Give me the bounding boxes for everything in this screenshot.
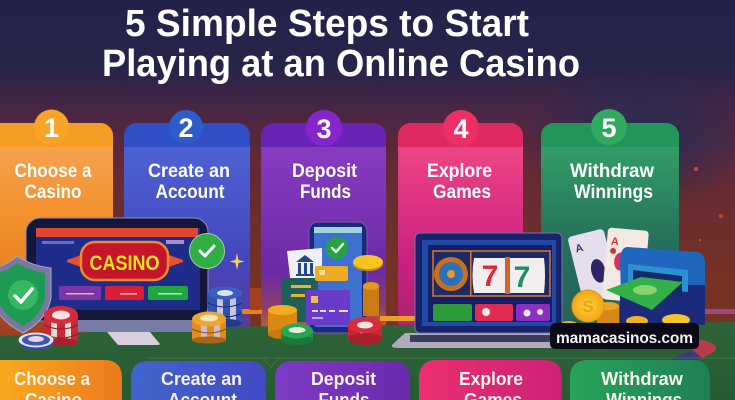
panel: bottom step 1 (0, 360, 122, 400)
orange glow ledge behind table (0, 288, 735, 336)
icon: gold coins (561, 290, 690, 327)
title: Playing at an Online Casino (102, 43, 580, 85)
casino sign: CASINO (90, 252, 160, 275)
step 4 badge (443, 110, 479, 146)
panel: step 4 card: Games (433, 182, 491, 203)
step 3 label: Deposit (292, 161, 358, 182)
icon: orange chip stack (192, 312, 226, 344)
step 1 badge (34, 110, 69, 144)
step 2 badge (169, 110, 203, 144)
icon: shield (0, 256, 51, 333)
panel: step 2 card: Account (156, 182, 225, 203)
table line (147, 358, 735, 367)
watermark pill: mamacasinos.com (556, 330, 693, 347)
watermark pill (550, 323, 699, 349)
icon: gold coins: S (582, 297, 594, 316)
game panel: 7 (514, 261, 530, 294)
yellow card (315, 266, 348, 281)
panel: step 3 card (261, 110, 386, 353)
title (102, 3, 580, 85)
purple card (306, 290, 350, 325)
game panel (433, 251, 550, 296)
step 5 label: Withdraw (570, 161, 654, 182)
panel: step 3 card: Funds (300, 182, 351, 203)
banknote (606, 277, 683, 310)
panel: step 1 card (0, 110, 113, 353)
panel: bottom step 5: Withdraw (601, 368, 684, 389)
icon: blue chip flat (18, 332, 54, 350)
step 2 label: Create an (148, 161, 230, 182)
panel: step 5 card: Winnings (574, 182, 653, 203)
check on phone (326, 237, 348, 259)
icon: gold coin stack left (268, 305, 297, 339)
illustration: laptop (392, 233, 562, 348)
green wallet (282, 278, 318, 322)
panel: bottom step 3 (275, 361, 410, 400)
icon: green chip (281, 324, 313, 345)
icon: cash machine (606, 247, 705, 325)
green table (0, 322, 735, 400)
panel: bottom step 1: Choose a (14, 368, 91, 389)
step 5 badge: 5 (601, 113, 617, 143)
panel: step 2 card (124, 110, 250, 353)
step 1 badge: 1 (44, 113, 59, 143)
panel: bottom step 5 (570, 360, 710, 400)
icon: sparkle (230, 253, 244, 270)
step 4 label: Explore (427, 161, 492, 182)
panel: step 1 card: Casino (24, 182, 82, 203)
bank document (287, 248, 322, 286)
icon: green check badge (190, 234, 224, 268)
laptop buttons (433, 304, 550, 321)
icon: red chip stack (44, 306, 78, 346)
step 4 badge: 4 (453, 114, 469, 144)
icon: chip strip at table edge (668, 339, 716, 362)
screen buttons (59, 286, 188, 300)
icon: playing cards: A (574, 242, 585, 256)
panel: bottom step 4: Explore (459, 368, 523, 389)
game panel: 7 (482, 260, 498, 293)
icon: gold coin stack right (353, 255, 383, 316)
icon: blue chip stack (208, 286, 242, 327)
step 1 label: Choose a (14, 161, 92, 182)
illustration: casino monitor (26, 218, 208, 345)
step 3 badge (306, 110, 342, 146)
panel: bottom step 3: Deposit (311, 368, 376, 389)
step 2 badge: 2 (178, 113, 194, 143)
title: 5 Simple Steps to Start (125, 3, 529, 45)
icon: playing cards: A (610, 236, 619, 248)
step 5 badge (591, 109, 627, 145)
icon: red chip right (348, 317, 382, 345)
step 3 badge: 3 (316, 114, 332, 144)
icon: playing cards (567, 227, 649, 303)
casino sign (67, 242, 183, 280)
panel: step 4 card (398, 110, 523, 353)
panel: bottom step 4 (419, 360, 562, 400)
illustration: phone and payment cards (282, 222, 367, 333)
panel: bottom step 2: Create an (161, 368, 242, 389)
panel: bottom step 2 (131, 361, 266, 400)
panel: step 5 card (541, 109, 679, 353)
